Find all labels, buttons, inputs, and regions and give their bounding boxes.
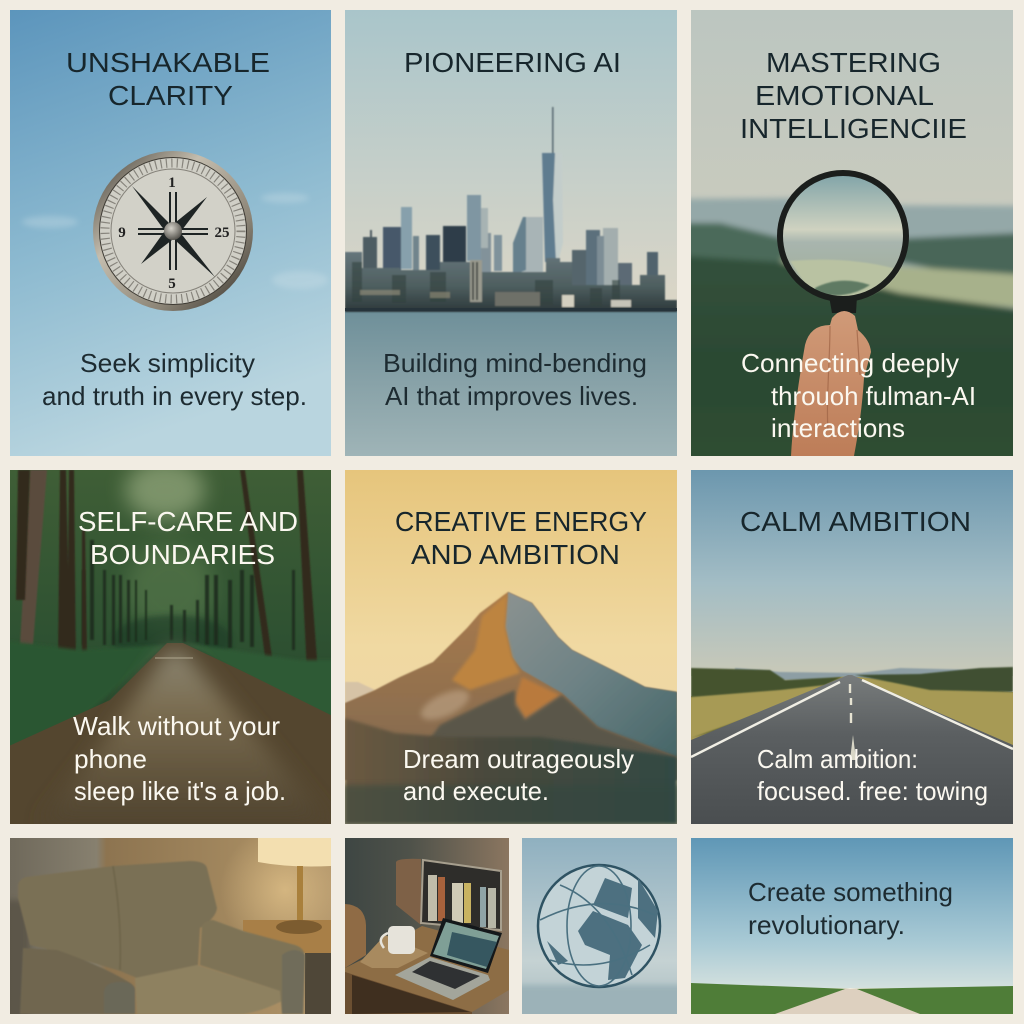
icon: compass: 5 bbox=[168, 276, 176, 292]
panel: armchair and lamp bbox=[10, 838, 331, 1014]
text: emotional intelligence caption: Connecting deeply bbox=[741, 348, 959, 378]
heading: pioneering AI: PIONEERING AI bbox=[404, 47, 621, 78]
panel: desk with laptop bbox=[345, 838, 509, 1014]
heading: mastering emotional intelligence: MASTERING bbox=[766, 47, 941, 78]
text: creative caption: Dream outrageously bbox=[403, 744, 634, 774]
icon: compass: 1 bbox=[168, 175, 176, 191]
text: revolutionary caption: revolutionary. bbox=[748, 910, 905, 940]
text: self-care caption: sleep like it's a job. bbox=[74, 776, 286, 806]
illustration: city skyline bbox=[345, 107, 677, 312]
text: emotional intelligence caption bbox=[741, 348, 976, 443]
heading: unshakable clarity: UNSHAKABLE bbox=[66, 47, 270, 78]
text: self-care caption bbox=[73, 711, 286, 806]
illustration: forest trees and path bbox=[0, 460, 345, 840]
panel: unshakable clarity bbox=[10, 10, 331, 456]
heading: creative energy and ambition: AND AMBITION bbox=[411, 539, 620, 570]
heading: self-care and boundaries: BOUNDARIES bbox=[90, 539, 275, 570]
text: emotional intelligence caption: throuoh fulman-AI bbox=[771, 381, 976, 411]
text: calm ambition caption: Calm ambition: bbox=[757, 744, 918, 774]
text: self-care caption: Walk without your bbox=[73, 711, 280, 741]
illustration: green fields and road bbox=[691, 983, 1013, 1014]
icon: glass globe bbox=[538, 865, 660, 987]
panel: emotional intelligence bbox=[691, 10, 1013, 456]
illustration: open road landscape bbox=[691, 667, 1013, 824]
text: clarity caption: Seek simplicity bbox=[80, 348, 255, 378]
text: clarity caption bbox=[42, 348, 307, 411]
heading: mastering emotional intelligence: INTELLIGENCIIE bbox=[740, 113, 967, 144]
panel: globe bbox=[522, 838, 677, 1014]
heading: unshakable clarity bbox=[66, 47, 270, 111]
text: clarity caption: and truth in every step. bbox=[42, 381, 307, 411]
panel: calm ambition bbox=[691, 470, 1013, 824]
illustration: armchair bbox=[18, 861, 305, 1014]
panel: pioneering AI bbox=[345, 10, 677, 456]
panel: self-care and boundaries bbox=[10, 470, 331, 824]
icon: compass: 9 bbox=[118, 225, 126, 241]
heading: calm ambition: CALM AMBITION bbox=[740, 506, 971, 537]
text: emotional intelligence caption: interactions bbox=[771, 413, 905, 443]
heading: self-care and boundaries bbox=[78, 506, 298, 570]
panel: create something revolutionary bbox=[691, 838, 1013, 1014]
panel: creative energy and ambition bbox=[345, 470, 677, 824]
icon: compass bbox=[93, 151, 253, 311]
illustration: desk bbox=[345, 904, 509, 1014]
text: calm ambition caption bbox=[757, 744, 988, 806]
icon: compass: 25 bbox=[214, 225, 230, 241]
text: revolutionary caption: Create something bbox=[748, 877, 953, 907]
illustration: bookshelf bbox=[396, 859, 501, 930]
heading: unshakable clarity: CLARITY bbox=[108, 80, 233, 111]
text: pioneering caption: Building mind-bending bbox=[383, 348, 647, 378]
text: pioneering caption: AI that improves lives. bbox=[385, 381, 638, 411]
heading: mastering emotional intelligence: EMOTIONAL bbox=[755, 80, 934, 111]
text: revolutionary caption bbox=[748, 877, 953, 940]
heading: self-care and boundaries: SELF-CARE AND bbox=[78, 506, 298, 537]
text: creative caption bbox=[403, 744, 634, 806]
text: self-care caption: phone bbox=[74, 744, 147, 774]
text: calm ambition caption: focused. free: towing bbox=[757, 776, 988, 806]
text: pioneering caption bbox=[383, 348, 647, 411]
heading: creative energy and ambition bbox=[395, 506, 647, 570]
heading: mastering emotional intelligence bbox=[740, 47, 967, 144]
illustration: mountain bbox=[340, 592, 685, 835]
illustration: lamp and side table bbox=[220, 825, 350, 1014]
text: creative caption: and execute. bbox=[403, 776, 549, 806]
icon: laptop bbox=[395, 918, 502, 1000]
icon: magnifying glass in hand bbox=[780, 173, 906, 456]
heading: creative energy and ambition: CREATIVE ENERGY bbox=[395, 506, 647, 537]
icon: coffee mug bbox=[381, 926, 415, 954]
